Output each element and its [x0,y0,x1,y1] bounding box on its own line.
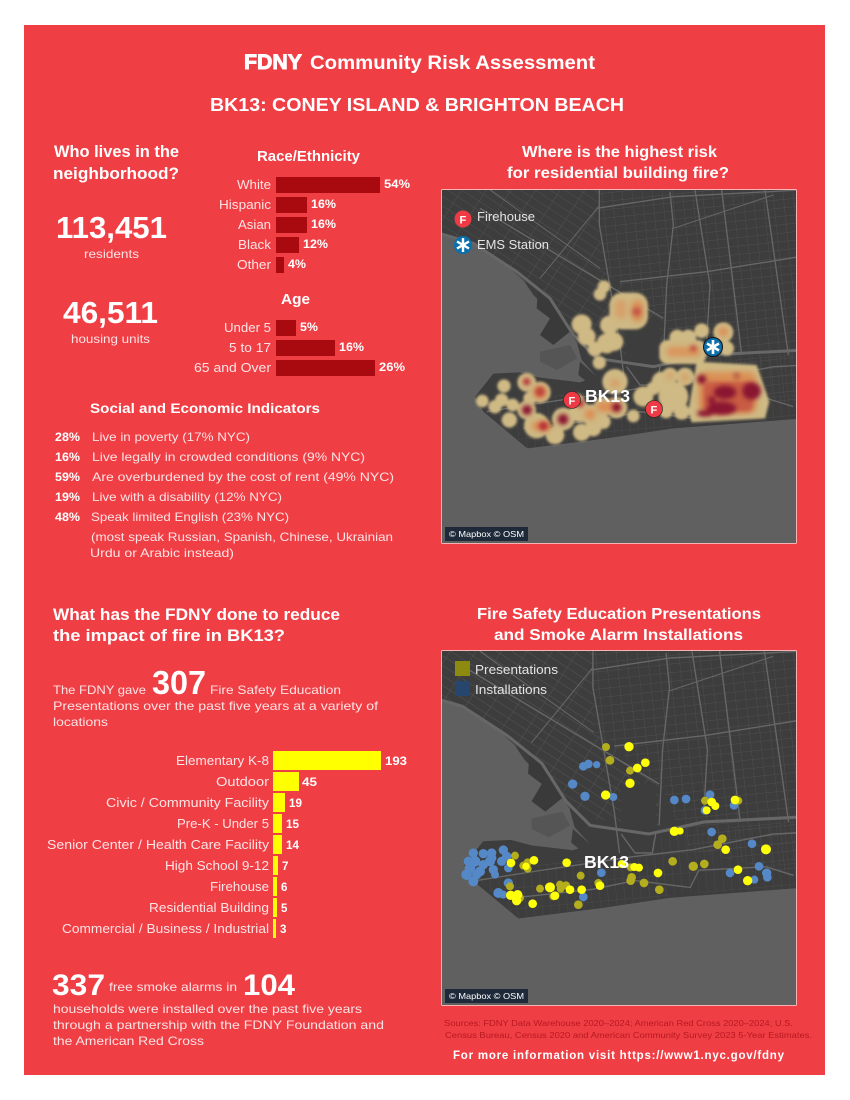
map attribution [445,989,528,1003]
bar chart: presentation locations: Civic / Community Facility [106,796,270,810]
bar chart: presentation locations: Pre-K - Under 5 [177,817,269,831]
bar chart: age: 16% [339,342,364,354]
bar chart: presentation locations: 193 [385,756,407,768]
bar chart: race and ethnicity: 4% [288,259,306,271]
social and economic indicators: 48% [55,512,80,524]
text block: 307 presentations: The FDNY gave [53,683,146,697]
icon: firehouse marker: F [568,396,576,408]
social and economic indicators: Live with a disability (12% NYC) [92,490,282,504]
heading: map 2: Fire Safety Education Presentations [477,606,761,623]
bar chart: presentation locations: 14 [286,840,300,852]
bar chart: presentation locations: 15 [286,819,300,831]
bar chart: race and ethnicity: Race/Ethnicity [257,149,360,165]
bar chart: race and ethnicity: Black [238,238,272,252]
heat: orange mid [532,300,757,430]
heading: map 2 [477,606,761,644]
map attribution [445,527,528,541]
map attribution: © Mapbox © OSM [449,529,524,539]
bar chart: race and ethnicity: Hispanic [219,198,271,212]
bar chart: race and ethnicity: 16% [311,199,336,211]
icon: EMS station marker [704,338,722,356]
heat: red hot spots [523,307,753,431]
social and economic indicators: Urdu or Arabic instead) [90,546,234,560]
icon: firehouse marker [564,392,580,408]
bar chart: presentation locations: Commercial / Business / Industrial [62,922,269,936]
bar chart: age: 5% [300,322,318,334]
bar chart: presentation locations: High School 9-12 [165,859,269,873]
title: FDNY [244,51,302,74]
bar chart: age: 26% [379,362,405,374]
social and economic indicators: 59% [55,472,80,484]
map attribution: © Mapbox © OSM [449,991,524,1001]
social and economic indicators: 19% [55,492,80,504]
bar chart: race and ethnicity: Asian [238,218,271,232]
social and economic indicators: Social and Economic Indicators [90,400,320,416]
legend: presentations and installations: Presentations [475,663,558,677]
heading: map 1: Where is the highest risk [522,144,717,161]
stat: housing units [63,295,158,346]
bar chart: presentation locations: 19 [289,798,302,810]
stat: housing units: housing units [71,332,150,346]
text block: 337 smoke alarms: 337 [52,969,105,1002]
stat: residents: residents [84,247,139,261]
text block: 307 presentations: Fire Safety Education [210,683,341,697]
heading: map 1 [507,144,729,182]
stat: residents [56,210,167,261]
sources note [444,1018,812,1040]
text block: 307 presentations: locations [53,715,108,729]
bar chart: presentation locations: 7 [282,861,288,873]
social and economic indicators [55,400,394,560]
legend: firehouse and EMS station: Firehouse [477,210,535,224]
bar chart: age: 65 and Over [194,361,271,375]
bar chart: presentation locations: Senior Center / Health Care Facility [47,838,270,852]
icon: firehouse marker: F [650,404,658,416]
bar chart: presentation locations: Residential Building [149,901,269,915]
stat: residents: 113,451 [56,210,167,245]
text block: 337 smoke alarms: free smoke alarms in [109,980,237,994]
legend: presentations and installations [455,661,558,697]
heading: what has the FDNY done: the impact of fire in BK13? [53,627,285,645]
bar chart: presentation locations [47,751,407,938]
social and economic indicators: 16% [55,452,80,464]
heading: map 2: and Smoke Alarm Installations [494,627,743,644]
legend: firehouse and EMS station: EMS Station [477,238,549,252]
legend: firehouse and EMS station [454,210,549,254]
bar chart: presentation locations: Firehouse [210,880,269,894]
map: residential building fire risk heatmap [420,165,850,598]
social and economic indicators: Live in poverty (17% NYC) [92,430,250,444]
bar chart: age: Age [281,292,310,308]
bar chart: presentation locations: 5 [281,903,288,915]
text block: 307 presentations: 307 [152,664,206,701]
bar chart: race and ethnicity: 12% [303,239,328,251]
text block: 337 smoke alarms: through a partnership with the FDNY Foundation and [53,1018,384,1032]
stat: housing units: 46,511 [63,295,158,330]
bar chart: race and ethnicity [219,149,410,273]
bar chart: presentation locations: Elementary K-8 [176,754,269,768]
bar chart: presentation locations: 45 [302,777,318,789]
heading: map 1: for residential building fire? [507,165,729,182]
text block: 337 smoke alarms [52,969,384,1048]
heat: tan base [476,280,769,444]
text block: 337 smoke alarms: households were installed over the past five years [53,1002,362,1016]
social and economic indicators: Live legally in crowded conditions (9% NYC) [92,450,365,464]
bar chart: presentation locations: 6 [281,882,287,894]
map: presentations and installations [441,650,797,1006]
heading: who lives in the neighborhood: neighborhood? [53,165,179,183]
text block: 307 presentations [53,664,379,729]
dots: installations [461,760,772,901]
map label: BK13: BK13 [585,386,630,406]
footer link: For more information visit https://www1.nyc.gov/fdny [453,1050,785,1062]
sources note: Sources: FDNY Data Warehouse 2020–2024; American Red Cross 2020–2024; U.S. [444,1018,793,1028]
bar chart: age: 5 to 17 [229,341,271,355]
social and economic indicators: (most speak Russian, Spanish, Chinese, Ukrainian [91,530,393,544]
sources note: Census Bureau, Census 2020 and American Community Survey 2023 5-Year Estimates. [445,1030,812,1040]
icon: firehouse marker [646,400,662,418]
map label: BK13: BK13 [584,852,629,872]
bar chart: presentation locations: 3 [280,924,286,936]
text block: 307 presentations: Presentations over the past five years at a variety of [53,699,379,713]
bar chart: age: Under 5 [224,321,271,335]
bar chart: race and ethnicity: 54% [384,179,410,191]
legend: presentations and installations: Installations [475,683,547,697]
dots: presentations (bright) [506,742,771,908]
bar chart: race and ethnicity: White [237,178,271,192]
dots: presentations (muted) [506,743,742,909]
heading: what has the FDNY done [53,606,340,645]
bar chart: presentation locations: Outdoor [216,775,269,789]
bar chart: race and ethnicity: 16% [311,219,336,231]
bar chart: age [194,292,405,376]
title: Community Risk Assessment [310,52,596,74]
heading: who lives in the neighborhood: Who lives in the [54,143,179,161]
social and economic indicators: Are overburdened by the cost of rent (49% NYC) [92,470,394,484]
social and economic indicators: 28% [55,432,80,444]
bar chart: race and ethnicity: Other [237,258,271,272]
subtitle: BK13: CONEY ISLAND & BRIGHTON BEACH [210,94,624,115]
text block: 337 smoke alarms: the American Red Cross [53,1034,204,1048]
legend: firehouse and EMS station: F [460,214,466,226]
text block: 337 smoke alarms: 104 [243,969,295,1002]
heading: what has the FDNY done: What has the FDNY done to reduce [53,606,340,624]
social and economic indicators: Speak limited English (23% NYC) [91,510,289,524]
heading: who lives in the neighborhood [53,143,179,183]
